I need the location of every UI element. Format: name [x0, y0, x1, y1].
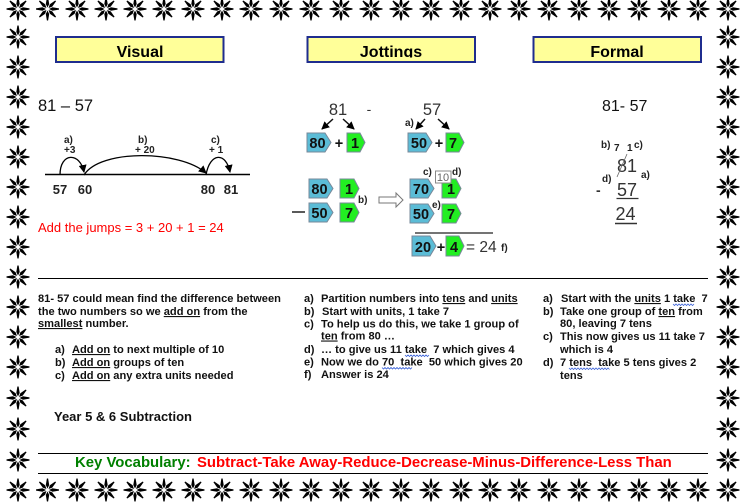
text: formal steps: 7 tens take 5 tens gives 2: [560, 357, 696, 369]
text: visual explanation: Add on any extra units needed: [72, 370, 234, 382]
red note: add the jumps: Add the jumps = 3 + 20 + 1 = 24: [38, 220, 224, 235]
text: visual explanation: b): [55, 357, 66, 369]
text: formal steps: 80, leaving 7 tens: [560, 318, 652, 330]
jottings diagram: +: [437, 240, 445, 256]
jottings diagram: e): [432, 200, 441, 211]
text: jottings steps: ten from 80 …: [321, 330, 395, 342]
text: jottings steps: [304, 293, 523, 381]
text: visual explanation: Add on groups of ten: [72, 357, 184, 369]
text: formal steps: d): [543, 357, 554, 369]
text: jottings steps: e): [304, 356, 314, 368]
number line with jumps: +3: [64, 145, 76, 156]
text: visual explanation: smallest number.: [38, 318, 129, 330]
number line with jumps: + 20: [135, 145, 155, 156]
formal column subtraction: 24: [616, 204, 636, 224]
number line with jumps: 81: [224, 182, 238, 197]
jottings diagram: [292, 101, 508, 256]
text: jottings steps: b): [304, 306, 315, 318]
jottings diagram: 50: [413, 207, 429, 223]
jottings diagram: 80: [311, 182, 328, 198]
number line with jumps: b): [138, 135, 147, 146]
jottings diagram: d): [452, 167, 461, 178]
text: formal steps: tens: [560, 370, 583, 382]
formal sum heading: 81- 57: [602, 98, 647, 115]
text: jottings steps: Now we do 70 take 50 which gives 20: [321, 356, 523, 368]
formal column subtraction: 81: [617, 156, 637, 176]
number line with jumps: 80: [201, 182, 215, 197]
heading: Jottings: Jottings: [360, 44, 422, 61]
formal column subtraction: 57: [617, 180, 637, 200]
text: visual explanation: [38, 293, 281, 382]
jottings diagram: 57: [423, 101, 441, 119]
heading: Jottings: [308, 37, 475, 62]
text: formal steps: Take one group of ten from: [560, 306, 703, 318]
jottings diagram: 7: [447, 207, 455, 223]
text: jottings steps: Partition numbers into tens and units: [321, 293, 518, 305]
text: jottings steps: Start with units, 1 take 7: [322, 306, 449, 318]
jottings diagram: 1: [351, 136, 359, 152]
text: visual explanation: the two numbers so we add on from the: [38, 306, 248, 318]
visual sum: 81 – 57: 81 – 57: [38, 97, 93, 115]
text: formal steps: Start with the units 1 take 7: [561, 293, 708, 305]
text: visual explanation: 81- 57 could mean find the difference between: [38, 293, 281, 305]
jottings diagram: 10: [437, 172, 449, 184]
formal column subtraction: c): [634, 140, 643, 151]
formal column subtraction: b): [601, 140, 610, 151]
formal column subtraction: d): [602, 174, 611, 185]
jottings diagram: -: [367, 101, 372, 117]
title: Year 5 & 6 Subtraction: Year 5 & 6 Subtraction: [54, 409, 192, 424]
text: visual explanation: Add on to next multiple of 10: [72, 344, 224, 356]
heading: Formal: Formal: [590, 44, 644, 61]
text: jottings steps: … to give us 11 take 7 which gives 4: [321, 344, 515, 356]
text: visual explanation: c): [55, 370, 65, 382]
formal column subtraction: 7: [614, 143, 620, 154]
jottings diagram: b): [358, 195, 367, 206]
jottings diagram: 7: [449, 136, 457, 152]
text: jottings steps: c): [304, 318, 314, 330]
jottings diagram: 80: [309, 136, 326, 152]
text: formal steps: This now gives us 11 take 7: [560, 331, 705, 343]
jottings diagram: = 24: [466, 239, 497, 256]
text: visual explanation: a): [55, 344, 65, 356]
text: jottings steps: f): [304, 369, 312, 381]
jottings diagram: 7: [345, 206, 353, 222]
heading: Visual: Visual: [117, 44, 163, 61]
key vocabulary band: Subtract-Take Away-Reduce-Decrease-Minus-Difference-Less Than: [197, 455, 672, 471]
jottings diagram: 50: [311, 206, 328, 222]
number line with jumps: 60: [78, 182, 92, 197]
heading: Visual: [56, 37, 224, 62]
jottings diagram: +: [435, 136, 443, 152]
text: formal steps: [543, 293, 708, 382]
number line with jumps: 57: [53, 182, 67, 197]
text: formal steps: b): [543, 306, 554, 318]
text: formal steps: a): [543, 293, 553, 305]
jottings diagram: a): [405, 118, 414, 129]
jottings diagram: 70: [413, 182, 429, 198]
number line with jumps: [45, 135, 250, 197]
jottings diagram: 81: [329, 101, 347, 119]
text: jottings steps: a): [304, 293, 314, 305]
key vocabulary band: [38, 454, 708, 474]
text: jottings steps: To help us do this, we take 1 group of: [321, 318, 519, 330]
text: formal steps: which is 4: [559, 344, 614, 356]
jottings diagram: 20: [415, 240, 431, 256]
text: jottings steps: Answer is 24: [321, 369, 390, 381]
formal column subtraction: -: [596, 182, 601, 198]
number line with jumps: c): [211, 135, 220, 146]
jottings diagram: +: [335, 136, 343, 152]
formal column subtraction: 1: [627, 143, 633, 154]
text: jottings steps: d): [304, 344, 315, 356]
jottings diagram: 1: [345, 182, 353, 198]
jottings diagram: f): [501, 243, 508, 254]
number line with jumps: a): [64, 135, 73, 146]
jottings diagram: 4: [450, 240, 458, 256]
jottings diagram: 1: [447, 182, 455, 198]
jottings diagram: 50: [411, 136, 427, 152]
formal column subtraction: [596, 140, 650, 224]
jottings diagram: c): [423, 167, 432, 178]
top divider: [38, 278, 708, 280]
formal column subtraction: a): [641, 170, 650, 181]
text: formal steps: c): [543, 331, 553, 343]
heading: Formal: [534, 37, 701, 62]
number line with jumps: + 1: [209, 145, 224, 156]
key vocabulary band: Key Vocabulary:: [75, 455, 191, 471]
